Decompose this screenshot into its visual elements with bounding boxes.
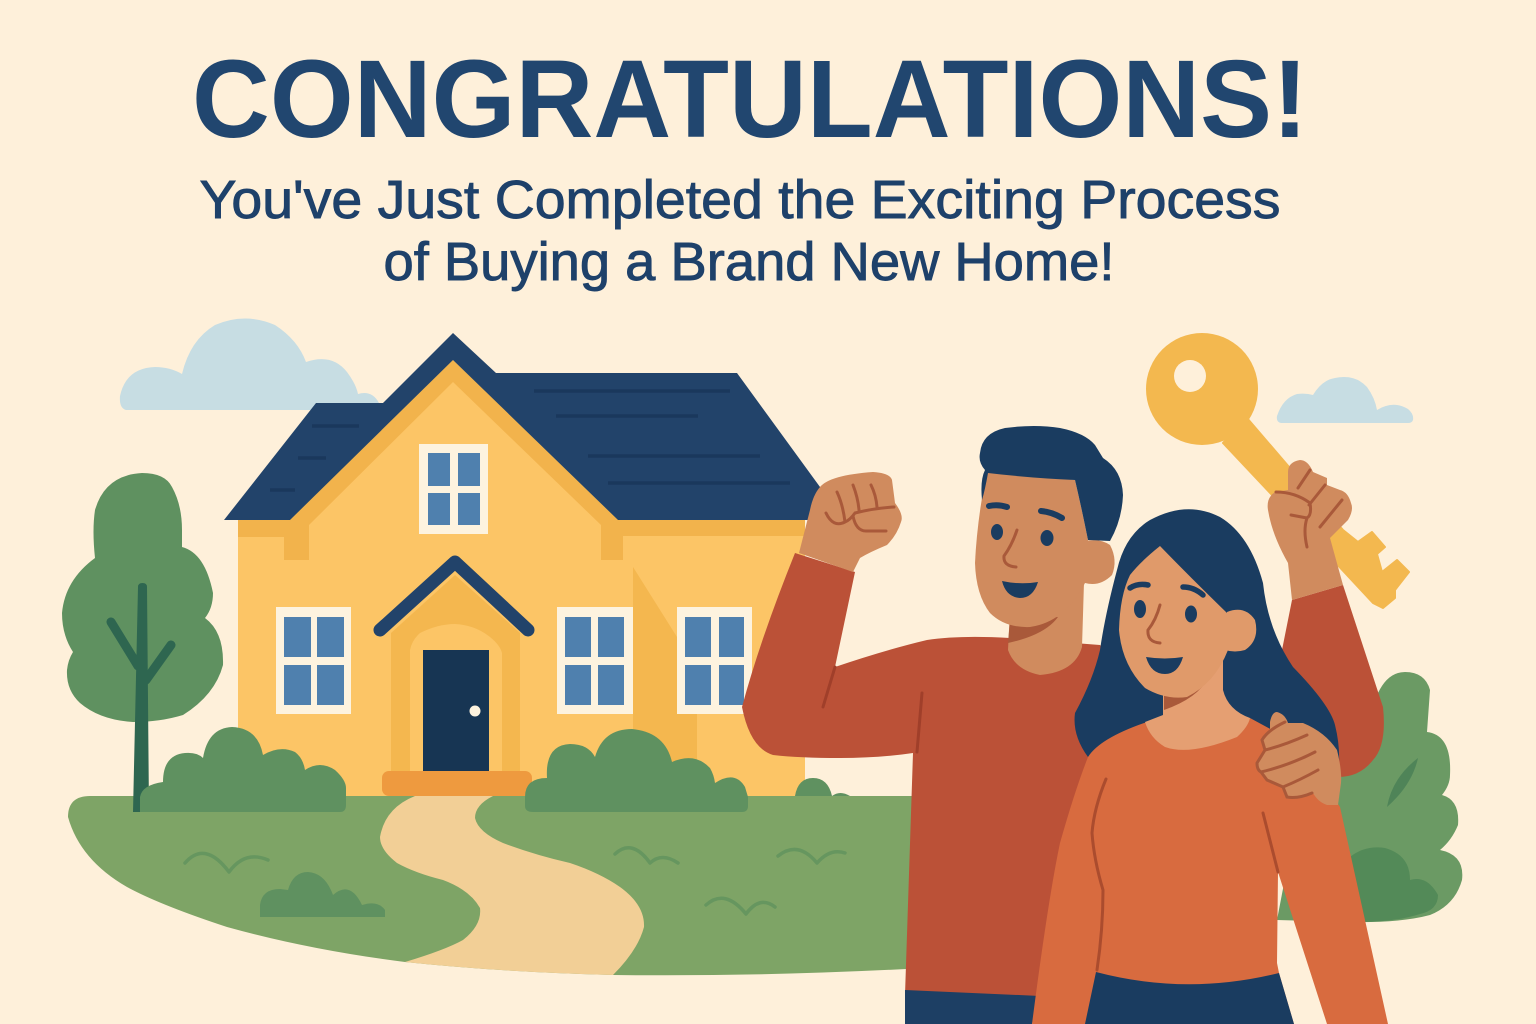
window middle — [557, 607, 633, 714]
man ear — [1085, 540, 1115, 584]
fist lines — [826, 485, 894, 531]
woman sweater — [1032, 718, 1388, 1024]
woman face — [1130, 584, 1203, 674]
man torso and arm — [742, 553, 1160, 1000]
right bush — [1277, 672, 1462, 922]
window right — [677, 607, 752, 714]
roof — [224, 333, 820, 520]
woman hair — [1075, 509, 1339, 780]
lawn — [68, 796, 960, 975]
house side shade — [633, 567, 697, 790]
subtitle — [200, 170, 1280, 292]
sweater creases — [1092, 779, 1278, 970]
bushes — [140, 727, 850, 917]
man head — [975, 470, 1088, 627]
key hand — [1268, 460, 1352, 600]
man's hand on shoulder — [1257, 712, 1341, 805]
house — [224, 333, 820, 796]
man face — [989, 505, 1062, 598]
attic window — [419, 444, 488, 534]
cloud left — [120, 318, 379, 410]
gable trim — [238, 360, 805, 560]
man neck shadow — [1008, 617, 1058, 643]
cloud right — [1277, 377, 1413, 423]
house wall — [238, 345, 805, 796]
man hair — [980, 426, 1123, 541]
woman skirt — [1085, 972, 1294, 1024]
man — [742, 426, 1384, 1024]
man raised sleeve behind — [1270, 585, 1384, 777]
man raised fist — [799, 472, 902, 572]
window left — [276, 607, 351, 714]
key — [1146, 333, 1409, 608]
man trousers — [905, 990, 1040, 1024]
woman ear — [1225, 610, 1256, 652]
woman — [1032, 509, 1388, 1024]
man neck — [1008, 550, 1085, 675]
woman head — [1119, 546, 1228, 698]
subtitle: of Buying a Brand New Home! — [384, 232, 1114, 292]
roof lines — [270, 391, 790, 490]
woman neck — [1145, 650, 1250, 750]
grass marks — [185, 848, 845, 914]
path — [380, 796, 644, 975]
sleeve creases — [823, 667, 922, 752]
title: CONGRATULATIONS! — [192, 38, 1308, 161]
woman neck shadow — [1164, 678, 1208, 710]
tree — [62, 473, 223, 812]
porch — [380, 562, 532, 796]
subtitle: You've Just Completed the Exciting Process — [200, 170, 1280, 230]
